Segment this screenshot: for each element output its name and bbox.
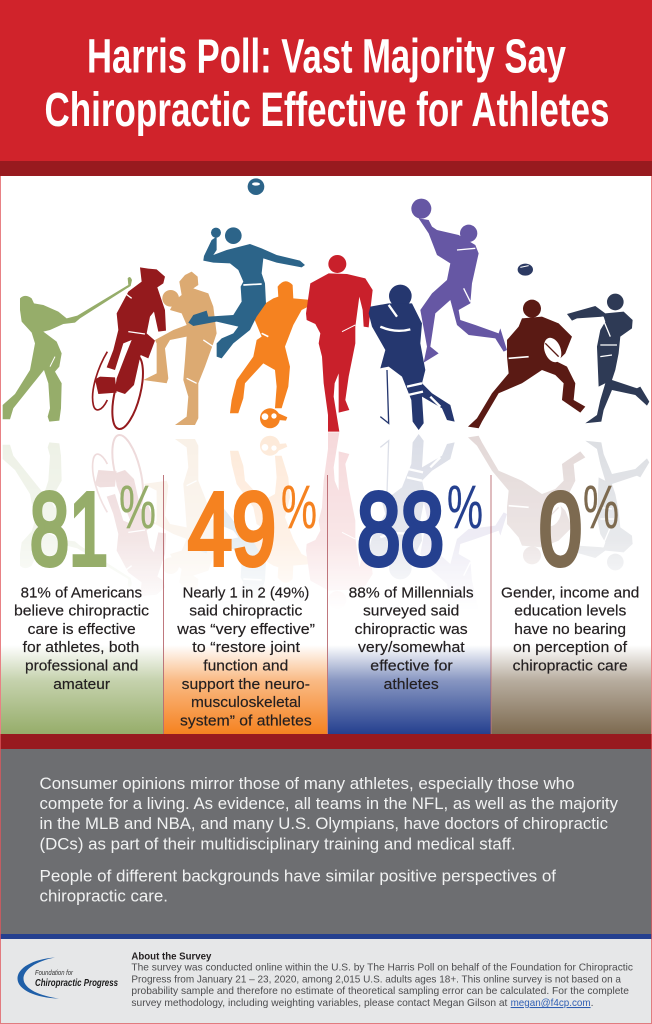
text: 49 percent description: function and <box>203 658 288 674</box>
text: 49 percent description: support the neuro- <box>182 677 310 693</box>
text: about the survey: megan@f4cp.com <box>511 997 591 1009</box>
stat: 81%: 81 <box>30 472 108 586</box>
figure: cyclist <box>93 267 166 432</box>
figure: rugby player <box>468 300 585 428</box>
figure: baseball pitcher <box>143 272 217 425</box>
text: 88 percent description: chiropractic was <box>355 622 468 638</box>
panel: 88 percent <box>328 472 491 734</box>
text: consumer opinions paragraph <box>40 775 619 853</box>
text: 88 percent description: very/somewhat <box>358 640 465 656</box>
stat: 0%: 0 <box>539 472 582 586</box>
athlete silhouettes <box>3 178 649 432</box>
figure: soccer player and ball <box>230 281 313 428</box>
text: 49 percent description: to “restore joint <box>192 640 300 656</box>
title <box>44 31 610 137</box>
text: 81 percent description <box>14 585 149 693</box>
text: consumer opinions paragraph: (DCs) as part of their multidisciplinary training and medical staff. <box>40 835 516 853</box>
text: 49 percent description: was “very effective” <box>176 622 315 638</box>
panel: footer <box>0 934 652 1024</box>
stat: 49%: % <box>281 473 317 541</box>
text: 49 percent description: Nearly 1 in 2 (49%) <box>183 585 309 601</box>
text: 88 percent description: surveyed said <box>363 604 459 620</box>
text: 88 percent description <box>349 585 474 693</box>
text: 49 percent description <box>176 585 315 729</box>
separator band <box>0 734 652 749</box>
text: 81 percent description: for athletes, both <box>23 640 139 656</box>
stat: 81%: % <box>119 473 156 541</box>
stat: 0%: % <box>583 473 619 541</box>
text: about the survey: . <box>591 997 594 1009</box>
text: 88 percent description: 88% of Millennials <box>349 585 474 601</box>
logo: Foundation for Chiropractic Progress: Chiropractic Progress <box>35 977 118 989</box>
text: 0 percent description: Gender, income and <box>501 585 639 601</box>
panel: 0 percent <box>492 472 651 734</box>
text: 81 percent description: amateur <box>53 677 110 693</box>
reflection of athletes <box>2 432 650 586</box>
text: 0 percent description <box>501 585 639 674</box>
panel: 49 percent <box>164 472 327 734</box>
icon: football in flight <box>518 264 533 276</box>
figure: hockey player <box>369 285 455 430</box>
figure: runner <box>306 255 373 432</box>
text: 0 percent description: chiropractic care <box>513 658 628 674</box>
text: 88 percent description: effective for <box>370 658 453 674</box>
text: backgrounds paragraph <box>40 867 556 906</box>
text: consumer opinions paragraph: compete for a living. As evidence, all teams in the NFL, as well as the majority <box>40 795 619 813</box>
text: 49 percent description: musculoskeletal <box>191 695 301 711</box>
text: about the survey: survey methodology, including weighting variables, please contact Megan Gilson at <box>131 997 507 1009</box>
text: 0 percent description: have no bearing <box>514 622 626 638</box>
text: backgrounds paragraph: People of different backgrounds have similar positive perspectives of <box>40 867 556 885</box>
text: 49 percent description: said chiropractic <box>189 604 302 620</box>
text: 81 percent description: care is effective <box>28 622 136 638</box>
logo: Foundation for Chiropractic Progress: Foundation for <box>35 968 73 977</box>
text: about the survey: About the Survey <box>131 950 212 962</box>
stat: 88%: % <box>447 473 483 541</box>
figure: golfer <box>3 277 132 422</box>
figure: leaping player with ball <box>411 199 507 363</box>
panel: 81 percent <box>1 472 164 734</box>
title banner <box>0 0 652 176</box>
text: 0 percent description: education levels <box>514 604 626 620</box>
text: consumer opinions paragraph: Consumer opinions mirror those of many athletes, especially those who <box>40 775 574 793</box>
text: 81 percent description: believe chiropractic <box>14 604 149 620</box>
logo: Foundation for Chiropractic Progress <box>17 958 118 998</box>
panel: consumer opinions <box>0 749 652 934</box>
text: 81 percent description: 81% of Americans <box>21 585 142 601</box>
stat: 88%: 88 <box>357 472 444 586</box>
text: about the survey: Progress from January 21 – 23, 2020, among 2,015 U.S. adults ages 18+. This online survey is not based on a <box>131 973 621 985</box>
text: about the survey: The survey was conducted online within the U.S. by The Harris Poll on behalf of the Foundation for Chiropractic <box>131 962 633 974</box>
text: 88 percent description: athletes <box>384 677 439 693</box>
text: 81 percent description: professional and <box>25 658 138 674</box>
text: about the survey: probability sample and therefore no estimate of theoretical sampling error can be calculated. For the complete <box>131 985 629 997</box>
figure: quarterback <box>567 294 649 423</box>
text: consumer opinions paragraph: in the MLB and NBA, and many U.S. Olympians, have doctors of chiropractic <box>40 815 608 833</box>
text: 49 percent description: system” of athletes <box>180 713 312 729</box>
text: 0 percent description: on perception of <box>513 640 628 656</box>
text: about the survey <box>131 950 633 1009</box>
text: backgrounds paragraph: chiropractic care. <box>40 888 168 906</box>
figure: volleyball player and ball <box>188 178 305 358</box>
stat: 49%: 49 <box>188 472 276 586</box>
